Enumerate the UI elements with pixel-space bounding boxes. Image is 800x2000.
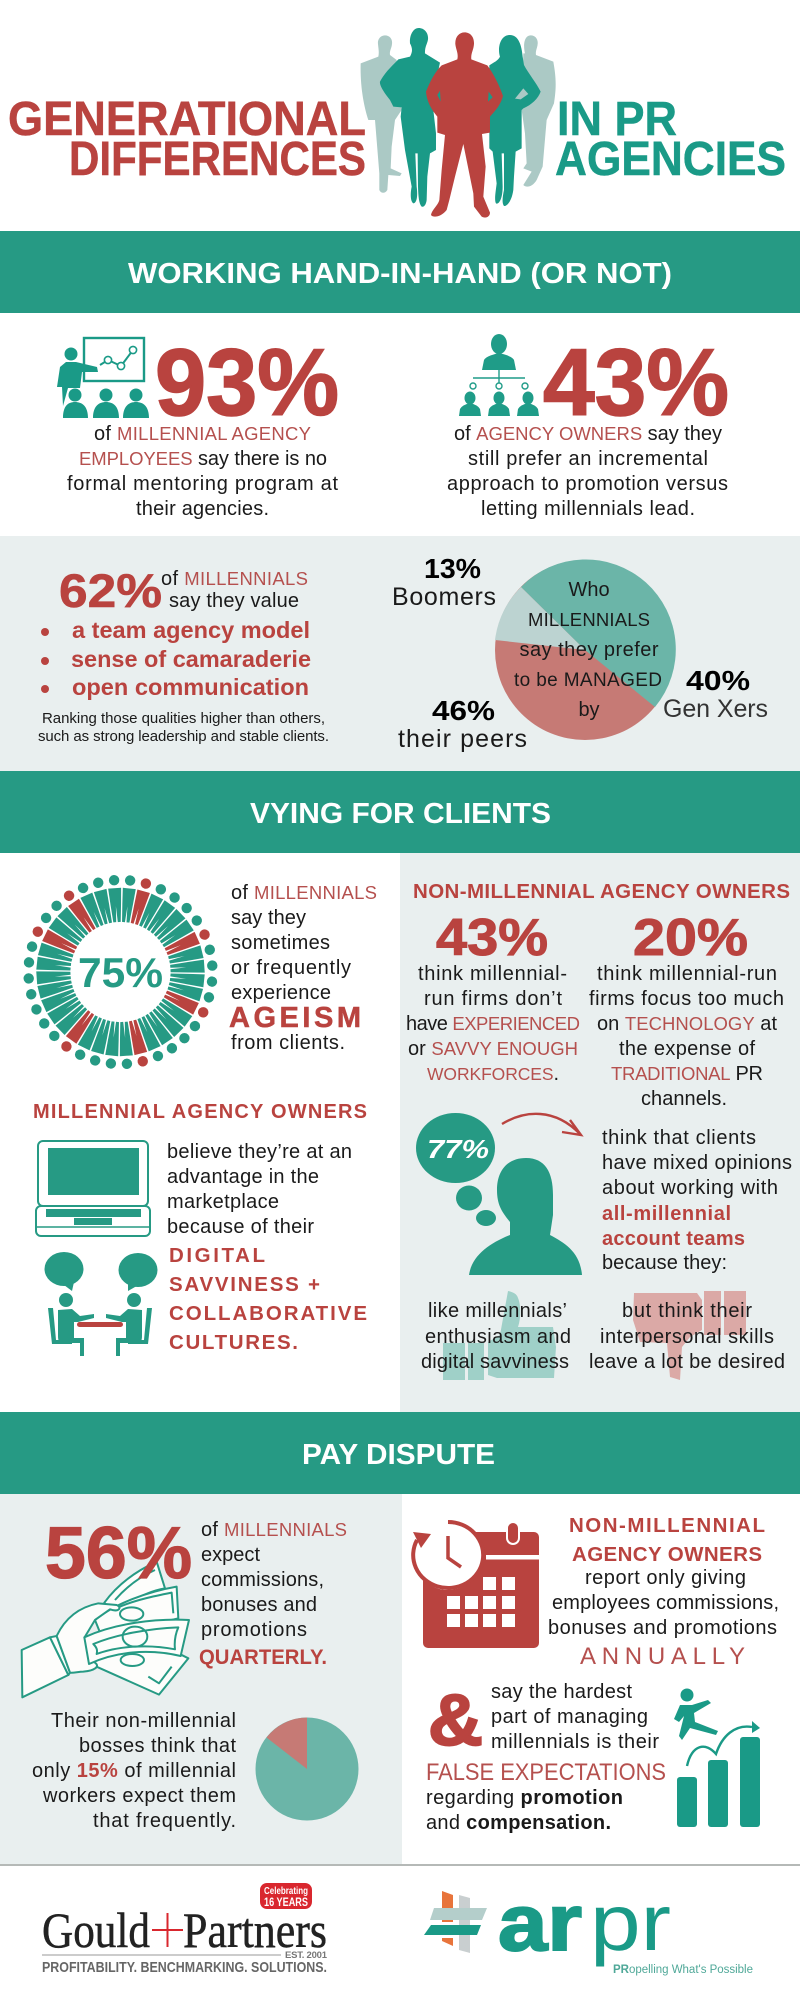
- text: ageism stat: of MILLENNIALS: [231, 882, 377, 904]
- text: 93% description: EMPLOYEES say there is no: [79, 448, 327, 470]
- text: non-millennial bosses: Their non-millennial: [51, 1710, 236, 1732]
- stat: 20% technology: think millennial-run: [597, 963, 777, 985]
- text: say they value: say they value: [169, 590, 299, 612]
- text: say they value: [161, 568, 308, 612]
- text: 93% description: formal mentoring program at: [67, 473, 338, 495]
- text: false expectations: part of managing: [491, 1706, 648, 1728]
- text: ageism stat: sometimes: [231, 932, 330, 954]
- chart: who millennials prefer to be managed by: 40%: [686, 665, 750, 696]
- text: 56% description: commissions,: [201, 1569, 324, 1591]
- text: ageism stat: from clients.: [231, 1032, 345, 1054]
- text: advantage in marketplace: CULTURES.: [169, 1331, 298, 1354]
- logo: arpr: pr: [590, 1878, 671, 1967]
- text: non-millennial owners annually: employees commissions,: [552, 1592, 779, 1614]
- text: ranking note: [38, 710, 329, 745]
- text: advantage in marketplace: COLLABORATIVE: [169, 1302, 367, 1325]
- logo: arpr: ar: [498, 1878, 582, 1967]
- text: false expectations: and compensation.: [426, 1812, 611, 1834]
- chart: who millennials prefer to be managed by: Boomers: [392, 583, 496, 611]
- title: left part: GENERATIONAL: [8, 93, 366, 146]
- stat: 93%: 93%: [155, 330, 339, 436]
- text: advantage in marketplace: believe they’re at an: [167, 1141, 352, 1163]
- stat: 43% experienced: [406, 909, 580, 1085]
- text: but think their: leave a lot be desired: [589, 1351, 785, 1373]
- stat: 20% technology: on TECHNOLOGY at: [597, 1013, 777, 1035]
- stat: 43% experienced: run firms don’t: [424, 988, 562, 1010]
- icon: laptop: [36, 1141, 150, 1236]
- stat: 43% experienced: have EXPERIENCED: [406, 1013, 580, 1035]
- stat: 43% experienced: or SAVVY ENOUGH: [408, 1038, 578, 1060]
- icon: person leaping over bar chart: [674, 1688, 760, 1827]
- icon: thumbs down: [633, 1291, 746, 1380]
- stat: 43%: 43%: [543, 330, 729, 436]
- chart: 15% pie: [256, 1718, 358, 1820]
- stat: 62%: 62%: [59, 564, 162, 617]
- logo: Gould + Partners: [42, 1883, 328, 1976]
- section banner: working hand-in-hand: WORKING HAND-IN-HAND (OR NOT): [128, 258, 672, 290]
- title: right part: IN PR: [557, 93, 677, 146]
- text: but think their: interpersonal skills: [600, 1326, 774, 1348]
- text: non-millennial owners annually: AGENCY OWNERS: [572, 1543, 762, 1566]
- stat: 20% technology: firms focus too much: [589, 988, 784, 1010]
- text: 93% description: their agencies.: [136, 498, 269, 520]
- chart: ring of people with 75%: [23, 875, 218, 1069]
- logo: Gould + Partners: Celebrating: [264, 1885, 308, 1897]
- text: non-millennial owners annually: bonuses and promotions: [548, 1617, 777, 1639]
- stat: 20% technology: TRADITIONAL PR: [611, 1063, 763, 1085]
- stat: 43% experienced: think millennial-: [418, 963, 567, 985]
- stat: 43% experienced: WORKFORCES.: [427, 1063, 559, 1085]
- text: like millennials: digital savviness: [421, 1351, 569, 1373]
- text: advantage in marketplace: DIGITAL: [169, 1244, 265, 1267]
- stat: 43% experienced: 43%: [436, 909, 548, 967]
- text: 56% description: of MILLENNIALS: [201, 1519, 347, 1541]
- stat: 20% technology: 20%: [633, 909, 748, 967]
- text: non-millennial bosses: bosses think that: [79, 1735, 236, 1757]
- list: valued qualities: a team agency model: [72, 617, 310, 643]
- chart: who millennials prefer to be managed by: Who: [568, 579, 610, 601]
- chart: ring of people with 75%: 75%: [78, 949, 163, 996]
- text: 56% description: [199, 1519, 347, 1669]
- chart: who millennials prefer to be managed by: 46%: [432, 695, 495, 726]
- stat: 20% technology: channels.: [641, 1088, 727, 1110]
- text: 77% description: about working with: [602, 1177, 778, 1199]
- text: non-millennial owners annually: [548, 1514, 779, 1670]
- icon: org chart: [459, 334, 539, 416]
- section banner: vying for clients: [0, 771, 800, 853]
- text: 43% description: letting millennials lead.: [481, 498, 695, 520]
- text: non-millennial owners annually: NON-MILLENNIAL: [569, 1514, 765, 1537]
- title: left part: DIFFERENCES: [69, 133, 366, 186]
- text: advantage in marketplace: because of their: [167, 1216, 314, 1238]
- text: false expectations: [426, 1681, 666, 1834]
- arrow: curved red arrow: [502, 1114, 581, 1135]
- text: 56% description: promotions: [201, 1619, 307, 1641]
- text: non-millennial bosses: workers expect them: [42, 1785, 236, 1807]
- section banner: pay dispute: PAY DISPUTE: [302, 1439, 495, 1471]
- text: false expectations: regarding promotion: [426, 1787, 623, 1809]
- text: ageism stat: say they: [231, 907, 306, 929]
- text: 56% description: expect: [201, 1544, 260, 1566]
- chart: who millennials prefer to be managed by: to be MANAGED: [514, 670, 662, 691]
- panel: 62% of millennials: [38, 564, 329, 745]
- text: 77% description: all-millennial: [602, 1203, 731, 1225]
- chart: who millennials prefer to be managed by: 13%: [424, 553, 481, 584]
- section banner: vying for clients: VYING FOR CLIENTS: [250, 798, 551, 830]
- chart: who millennials prefer to be managed by: their peers: [398, 725, 527, 753]
- text: 77% description: [602, 1127, 792, 1274]
- icon: person thinking 77%: [416, 1113, 582, 1275]
- text: 77% description: account teams: [602, 1228, 745, 1250]
- illustration: group of business people silhouettes: [361, 28, 556, 218]
- heading: non-millennial agency owners: NON-MILLENNIAL AGENCY OWNERS: [413, 880, 790, 903]
- list: valued qualities: sense of camaraderie: [71, 646, 311, 672]
- logo: Gould + Partners: Gould: [42, 1902, 150, 1958]
- icon: calendar with clock: [413, 1520, 539, 1648]
- text: 93% description: of MILLENNIAL AGENCY: [94, 423, 311, 445]
- logo: arpr: [424, 1878, 753, 1976]
- icon: person thinking 77%: 77%: [427, 1134, 489, 1164]
- text: like millennials: like millennials’: [428, 1300, 567, 1322]
- chart: who millennials prefer to be managed by: by: [578, 699, 600, 721]
- text: 43% description: still prefer an incremental: [468, 448, 708, 470]
- text: ageism stat: [229, 882, 377, 1054]
- logo: arpr: PRopelling What's Possible: [613, 1964, 753, 1976]
- chart: who millennials prefer to be managed by: Gen Xers: [663, 695, 768, 723]
- logo: Gould + Partners: EST. 2001: [285, 1950, 328, 1961]
- list: valued qualities: open communication: [72, 674, 309, 700]
- text: 77% description: think that clients: [602, 1127, 756, 1149]
- icon: thumbs up: [443, 1291, 556, 1380]
- text: ageism stat: or frequently: [231, 957, 351, 979]
- title: right part: AGENCIES: [555, 133, 786, 186]
- text: 56% description: bonuses and: [201, 1594, 317, 1616]
- stat: 20% technology: the expense of: [619, 1038, 755, 1060]
- heading: millennial agency owners: MILLENNIAL AGENCY OWNERS: [33, 1101, 367, 1123]
- text: 93% description: [67, 423, 338, 520]
- text: non-millennial bosses: that frequently.: [93, 1810, 236, 1832]
- text: say they value: of MILLENNIALS: [161, 568, 308, 590]
- text: non-millennial bosses: [32, 1710, 236, 1832]
- chart: who millennials prefer to be managed by: MILLENNIALS: [528, 609, 650, 630]
- text: non-millennial owners annually: report only giving: [585, 1567, 746, 1589]
- icon: presenter with audience: [57, 338, 149, 418]
- text: ageism stat: experience: [231, 982, 331, 1004]
- text: ageism stat: AGEISM: [229, 1002, 361, 1034]
- title: left part: [8, 93, 366, 186]
- logo: Gould + Partners: Partners: [183, 1902, 327, 1958]
- text: advantage in marketplace: advantage in the: [167, 1166, 319, 1188]
- text: ranking note: such as strong leadership and stable clients.: [38, 728, 329, 745]
- title: right part: [555, 93, 786, 186]
- logo: Gould + Partners: PROFITABILITY. BENCHMARKING. SOLUTIONS.: [42, 1959, 327, 1976]
- text: ranking note: Ranking those qualities higher than others,: [42, 710, 325, 727]
- icon: hand holding money: [22, 1562, 189, 1697]
- section banner: working hand-in-hand: [0, 231, 800, 313]
- chart: who millennials prefer to be managed by: say they prefer: [520, 639, 659, 661]
- text: 77% description: because they:: [602, 1252, 727, 1274]
- text: 43% description: approach to promotion versus: [447, 473, 728, 495]
- icon: two people talking at a table: [44, 1252, 158, 1356]
- text: 77% description: have mixed opinions: [602, 1152, 792, 1174]
- stat: 56%: 56%: [45, 1513, 192, 1594]
- text: false expectations: millennials is their: [491, 1731, 659, 1753]
- text: false expectations: FALSE EXPECTATIONS: [426, 1759, 666, 1786]
- text: advantage in marketplace: [167, 1141, 367, 1354]
- chart: who millennials prefer to be managed by: [392, 553, 768, 753]
- text: advantage in marketplace: SAVVINESS +: [169, 1273, 320, 1296]
- text: but think their: [589, 1300, 785, 1373]
- logo: Gould + Partners: 16 YEARS: [264, 1897, 308, 1909]
- text: advantage in marketplace: marketplace: [167, 1191, 279, 1213]
- text: like millennials: [421, 1300, 571, 1373]
- section banner: pay dispute: [0, 1412, 800, 1494]
- text: non-millennial owners annually: ANNUALLY: [580, 1643, 745, 1670]
- stat: 20% technology: [589, 909, 784, 1110]
- text: 43% description: of AGENCY OWNERS say they: [454, 423, 722, 445]
- icon: ampersand: &: [428, 1681, 483, 1761]
- text: like millennials: enthusiasm and: [425, 1326, 571, 1348]
- text: non-millennial bosses: only 15% of millennial: [32, 1760, 236, 1782]
- text: but think their: but think their: [622, 1300, 752, 1322]
- text: false expectations: say the hardest: [491, 1681, 632, 1703]
- text: 56% description: QUARTERLY.: [199, 1645, 327, 1669]
- list: valued qualities: [41, 617, 311, 700]
- text: 43% description: [447, 423, 728, 520]
